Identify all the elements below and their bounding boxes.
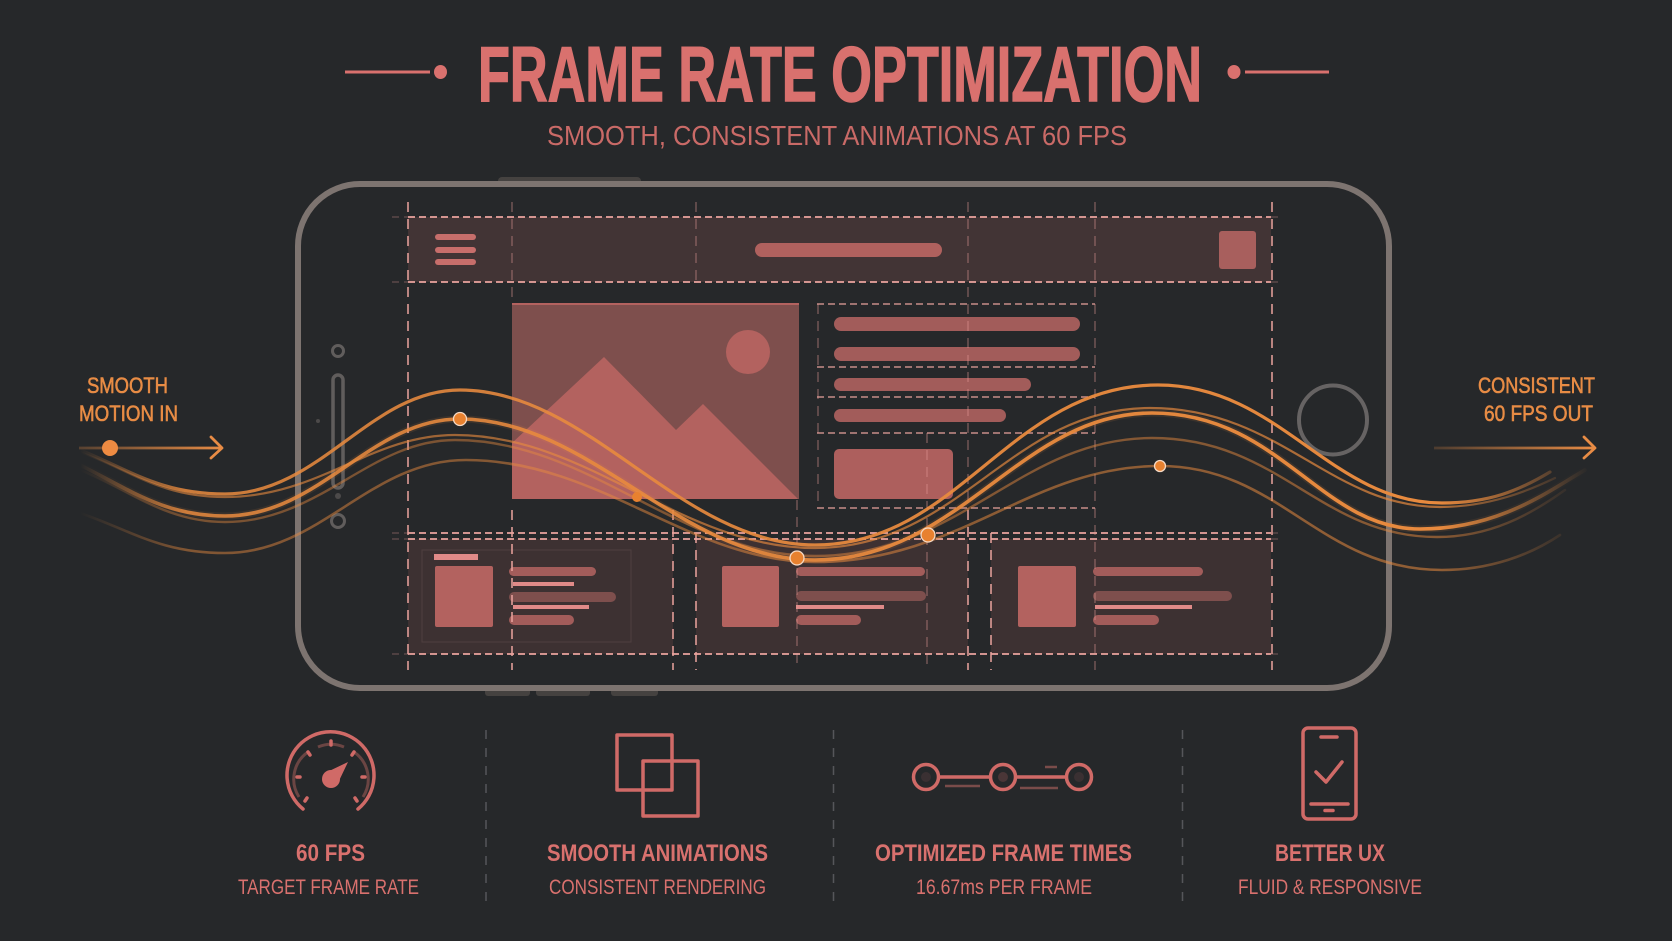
icon: phone with check: [1303, 728, 1356, 819]
feature: better ux: BETTER UX: [1275, 840, 1385, 867]
wave dots: [454, 412, 1166, 565]
card three: [991, 539, 1271, 654]
feature: better ux: FLUID & RESPONSIVE: [1238, 876, 1422, 899]
icon: frame timeline: [914, 764, 1092, 790]
text block with button: [834, 317, 1080, 499]
feature: 60 fps: [238, 732, 419, 899]
feature: 60 fps: 60 FPS: [296, 840, 365, 867]
phone frame: [298, 177, 1389, 696]
title with decorative dots: FRAME RATE OPTIMIZATION: [478, 30, 1202, 118]
card one: [408, 539, 673, 654]
feature: smooth animations: CONSISTENT RENDERING: [549, 876, 766, 899]
feature: smooth animations: [547, 735, 768, 899]
feature: 60 fps: TARGET FRAME RATE: [238, 876, 419, 899]
arrow: motion in: [79, 437, 222, 458]
label: smooth motion in: SMOOTH: [87, 373, 168, 398]
motion waves: [80, 385, 1585, 570]
label: smooth motion in: [79, 373, 178, 426]
icon: gauge: [287, 732, 374, 809]
app header bar: [408, 217, 1271, 282]
bottom dividers: [486, 730, 1182, 903]
icon: gauge needle: [322, 762, 348, 788]
layout grid guides: [392, 202, 1282, 670]
feature: optimized frame times: OPTIMIZED FRAME TIMES: [875, 840, 1132, 867]
image placeholder: [512, 303, 799, 499]
icon: overlapping frames: [617, 735, 698, 816]
feature: better ux: [1238, 728, 1422, 899]
label: consistent 60 fps out: [1478, 373, 1595, 426]
feature: smooth animations: SMOOTH ANIMATIONS: [547, 840, 768, 867]
feature: optimized frame times: [875, 764, 1132, 899]
feature: optimized frame times: 16.67ms PER FRAME: [916, 876, 1092, 899]
label: smooth motion in: MOTION IN: [79, 401, 178, 426]
card two: [696, 539, 968, 654]
label: consistent 60 fps out: CONSISTENT: [1478, 373, 1595, 398]
subtitle: SMOOTH, CONSISTENT ANIMATIONS AT 60 FPS: [547, 120, 1127, 151]
arrow: fps out: [1434, 437, 1595, 458]
label: consistent 60 fps out: 60 FPS OUT: [1484, 401, 1593, 426]
